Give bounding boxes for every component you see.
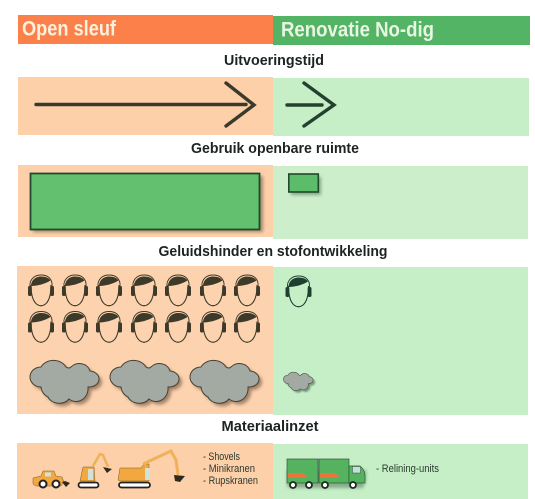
panel: materiaalinzet no-dig <box>273 444 528 499</box>
equipment list no-dig: - Relining-units <box>376 463 439 475</box>
panel: geluid en stof no-dig <box>273 267 528 415</box>
arrow: long duration <box>36 83 254 126</box>
arrow: short duration <box>287 83 334 126</box>
panel: uitvoeringstijd open sleuf <box>18 77 273 135</box>
panel: uitvoeringstijd no-dig <box>273 78 529 136</box>
small green area <box>289 174 321 195</box>
panel: geluid en stof open sleuf <box>17 266 273 414</box>
equipment list open sleuf: - Shovels <box>203 451 240 463</box>
equipment list open sleuf <box>203 451 258 487</box>
panel: openbare ruimte no-dig <box>273 166 528 239</box>
header: Open sleuf: Open sleuf <box>22 18 117 40</box>
equipment list open sleuf: - Minikranen <box>203 463 255 475</box>
heading: Gebruik openbare ruimte: Gebruik openbare ruimte <box>191 140 359 157</box>
header: Open sleuf <box>18 15 273 44</box>
large green area <box>30 174 263 232</box>
icons: heads with ear protection row 2 <box>28 312 260 342</box>
icons: heads with ear protection row 1 <box>28 275 260 306</box>
icon: rupskraan <box>118 451 185 488</box>
heading: Materiaalinzet: Materiaalinzet <box>222 418 319 435</box>
panel: materiaalinzet open sleuf <box>17 443 273 499</box>
icon: small dust cloud no-dig <box>283 372 315 393</box>
panel: openbare ruimte open sleuf <box>18 165 273 237</box>
heading: Geluidshinder en stofontwikkeling: Geluidshinder en stofontwikkeling <box>158 243 388 260</box>
icon: shovel <box>33 471 70 488</box>
icon: minikraan <box>78 454 112 488</box>
header: Renovatie No-dig: Renovatie No-dig <box>281 18 434 42</box>
icon: relining trucks <box>287 459 366 488</box>
header: Renovatie No-dig <box>273 16 530 45</box>
heading: Uitvoeringstijd: Uitvoeringstijd <box>224 52 324 69</box>
icons: dust clouds open sleuf <box>30 360 262 406</box>
equipment list open sleuf: - Rupskranen <box>203 475 258 487</box>
icon: head with ear protection no-dig <box>286 276 312 307</box>
